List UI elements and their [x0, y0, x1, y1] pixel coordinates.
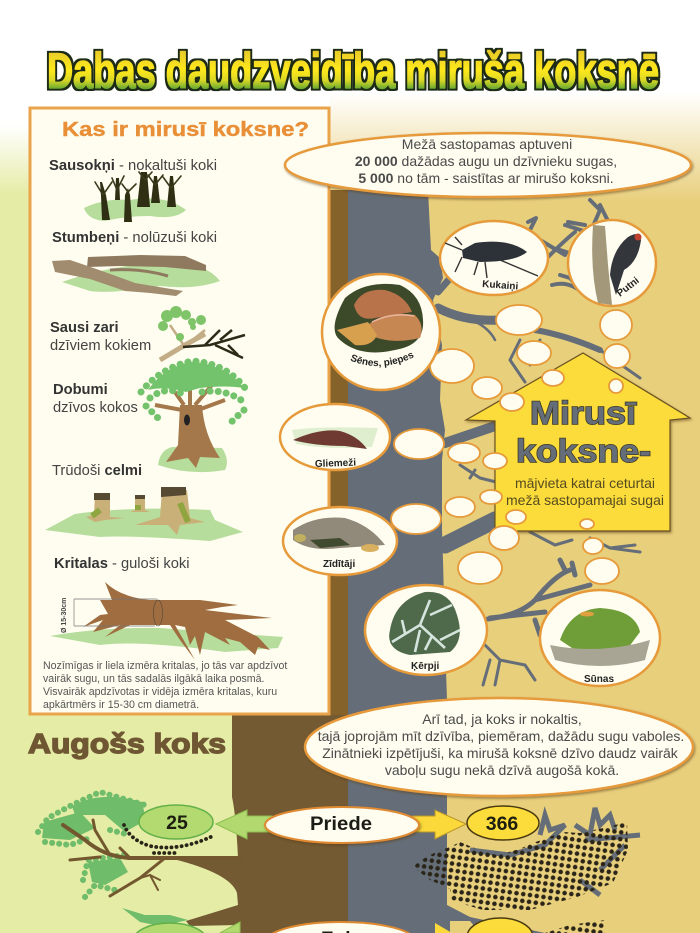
label: Sēnes, piepes	[350, 352, 414, 368]
value: 366	[467, 806, 539, 840]
icon: dry branch on living tree	[158, 306, 245, 360]
text: Dobumi: Dobumi	[53, 382, 108, 398]
bubble: Zīdītāji	[283, 507, 397, 575]
bubble: Sēnes, piepes	[320, 272, 442, 392]
icon: fallen log with diameter	[50, 582, 283, 660]
bubble: Putni	[568, 220, 656, 306]
house text: mežā sastopamajai sugai	[506, 492, 664, 508]
callout: beetles in dead wood: tajā joprojām mīt dzīvība, piemēram, dažādu sugu vaboles.	[318, 728, 684, 744]
icon: broken logs	[52, 255, 220, 296]
arrow: yellow	[435, 923, 452, 933]
value: 25: 25	[166, 812, 188, 834]
label: Priede	[265, 807, 419, 843]
dots: 366 beetle species with dead branch	[413, 808, 640, 910]
arrow: yellow	[412, 810, 466, 839]
dots: 25 beetle species	[124, 825, 215, 853]
bubble: Sūnas	[540, 590, 660, 686]
bubble: Ķērpji	[365, 585, 487, 675]
text: Sausi zari: dzīviem kokiem	[50, 338, 151, 354]
text: Stumbeņi: Stumbeņi - nolūzuši koki	[52, 230, 217, 246]
label: Egle	[267, 922, 415, 933]
tree trunk: brown bark and grey dead wood	[165, 190, 640, 933]
icon: tree with hollow	[141, 361, 248, 472]
house heading: koksne-	[516, 433, 651, 469]
house: Mirusī koksne	[466, 353, 690, 531]
text: note on large logs: Nozīmīgas ir liela izmēra kritalas, jo tās var apdzīvot	[43, 660, 287, 672]
dots	[545, 920, 605, 933]
label: Gliemeži	[315, 458, 356, 470]
tree crown: living tree branch	[38, 792, 240, 926]
icon: dry standing trees	[84, 172, 186, 222]
label: Zīdītāji	[323, 559, 355, 570]
heading: Augošs koks: Augošs koks	[28, 728, 226, 759]
callout: beetles in dead wood: vaboļu sugu nekā dzīvā augošā kokā.	[385, 762, 619, 778]
icon: rotting stumps	[45, 487, 243, 541]
value: 366: 366	[486, 813, 518, 835]
icon: fallen log with diameter: Ø 15-30cm	[61, 598, 68, 633]
empty bubbles	[391, 305, 632, 584]
label: Priede: Priede	[310, 814, 372, 835]
callout: species count: Mežā sastopamas aptuveni	[402, 136, 572, 152]
callout: species count: 20 000 dažādas augu un dzīvnieku sugas,	[355, 153, 617, 169]
house text: mājvieta katrai ceturtai	[515, 475, 655, 491]
panel: Kas ir mirusī koksne	[30, 108, 329, 714]
callout: species count	[285, 133, 691, 197]
text: Sausi zari: Sausi zari	[50, 320, 119, 336]
comparison row: Priede	[139, 805, 539, 843]
label: Sūnas	[584, 674, 614, 685]
value ellipse: yellow	[467, 918, 533, 933]
house heading: Mirusī	[530, 395, 637, 431]
text: Kritalas: Kritalas - guloši koki	[54, 556, 190, 572]
label: Putni	[615, 275, 642, 299]
value ellipse: green	[133, 923, 207, 933]
panel heading: Kas ir mirusī koksne?	[62, 119, 309, 141]
text: Sausokņi: Sausokņi - nokaltuši koki	[49, 158, 217, 174]
bubble: Gliemeži	[280, 404, 390, 470]
text: note on large logs: apkārtmērs ir 15-30 cm diametrā.	[43, 699, 199, 711]
callout: species count: 5 000 no tām - saistītas ar mirušo koksni.	[358, 170, 614, 186]
label: Kukaiņi	[482, 279, 519, 293]
bubble: Kukaiņi	[440, 221, 548, 295]
label: Ķērpji	[411, 661, 440, 672]
callout: beetles in dead wood: Zinātnieki izpētījuši, ka mirušā koksnē dzīvo daudz vairāk	[322, 745, 679, 761]
arrow: green	[220, 922, 240, 933]
comparison row: Egle (cropped)	[133, 918, 605, 933]
notch of tan background	[450, 921, 480, 933]
text: Dobumi: dzīvos kokos	[53, 400, 138, 416]
arrow: green	[216, 810, 272, 839]
text: note on large logs: vairāk sugu, un tās sadalās ilgākā laika posmā.	[43, 673, 264, 685]
text: Trūdoši celmi: Trūdoši celmi	[52, 463, 142, 479]
callout: beetles in dead wood	[305, 698, 693, 796]
callout: beetles in dead wood: Arī tad, ja koks ir nokaltis,	[422, 711, 582, 727]
text: note on large logs: Visvairāk apdzīvotas ir vidēja izmēra kritalas, kuru	[43, 686, 277, 698]
value: 25	[139, 805, 213, 839]
